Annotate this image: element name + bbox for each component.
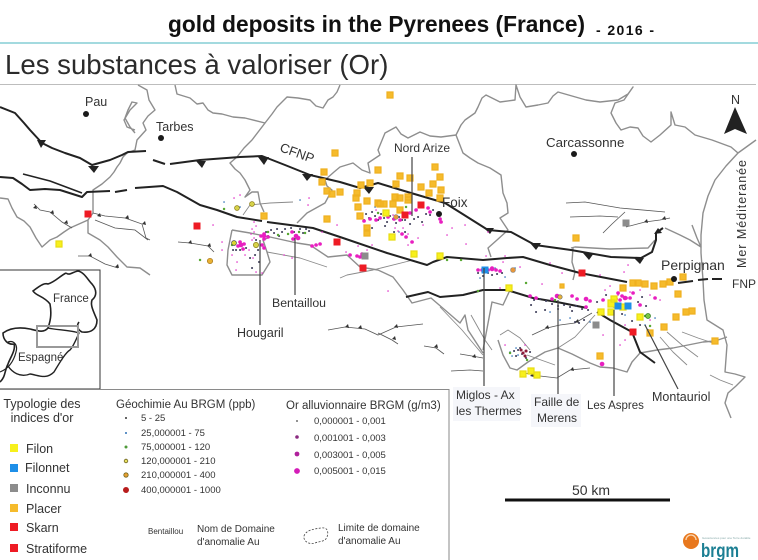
legend: or alluvionnaire: 0,005001 - 0,015 [314, 466, 386, 477]
filonnet blue squares [482, 267, 631, 309]
legend: typologie des indices d'or: Stratiforme [26, 542, 87, 556]
label: Les Aspres: Les Aspres [587, 400, 644, 412]
label: Les Aspres [587, 310, 644, 412]
legend: typologie des indices d'or: Skarn [26, 521, 59, 535]
map: CFNP fault [0, 107, 663, 264]
scale bar: 50 km [572, 482, 610, 498]
title: - 2016 - [596, 22, 654, 38]
brgm logo: Géosciences pour une Terre durable [702, 536, 751, 540]
inset locator map [0, 270, 100, 389]
legend: domain limit key: Limite de domaine [338, 523, 420, 534]
geochemistry and alluvial gold points [200, 195, 660, 364]
label: Bentaillou [272, 238, 326, 310]
label: Faille de Merens: Faille de [534, 395, 580, 409]
legend: domain name key [148, 524, 275, 548]
scale bar [505, 482, 670, 502]
title: gold deposits in the Pyrenees (France) [168, 11, 585, 37]
skarn red squares [85, 202, 636, 335]
gold placer squares [261, 92, 718, 359]
label: Faille de Merens: Merens [537, 411, 577, 425]
city and fault labels: Carcassonne [546, 135, 624, 150]
inconnu grey squares [362, 220, 629, 328]
inset locator map: Espagné [18, 352, 63, 364]
legend: domain limit key: d'anomalie Au [338, 536, 401, 547]
legend: domain name key: Bentaillou [148, 527, 183, 536]
label: Miglos - Ax les Thermes: Miglos - Ax [456, 388, 515, 402]
label: Faille de Merens [531, 300, 581, 427]
city and fault labels: Foix [442, 195, 468, 210]
legend: or alluvionnaire: 0,003001 - 0,005 [314, 450, 386, 461]
legend: géochimie: 120,000001 - 210 [141, 456, 215, 467]
legend: typologie des indices d'or [3, 397, 87, 556]
map: administrative boundaries and coast [0, 85, 756, 418]
inset locator map: France [53, 293, 89, 305]
legend: géochimie: 75,000001 - 120 [141, 442, 210, 453]
legend: géochimie: 400,000001 - 1000 [141, 485, 221, 496]
legend: typologie des indices d'or: Filonnet [25, 461, 70, 475]
city and fault labels: Tarbes [156, 120, 194, 134]
subtitle: Les substances à valoriser (Or) [5, 49, 388, 80]
legend: domain name key: Nom de Domaine [197, 524, 275, 535]
label: Hougaril: Hougaril [237, 326, 284, 340]
legend: typologie des indices d'or: Typologie des [3, 397, 81, 411]
legend frame [0, 390, 449, 560]
legend: or alluvionnaire: 0,000001 - 0,001 [314, 416, 386, 427]
legend: typologie des indices d'or: Inconnu [26, 482, 71, 496]
city and fault labels: Mer Méditeranée [735, 160, 749, 268]
legend: géochimie: Géochimie Au BRGM (ppb) [116, 399, 256, 411]
label: Montauriol [645, 325, 710, 404]
legend: typologie des indices d'or: indices d'or [11, 411, 73, 425]
city and fault labels: Pau [85, 95, 107, 109]
city and fault labels: FNP [732, 277, 756, 291]
legend: or alluvionnaire [286, 400, 441, 477]
north arrow [724, 93, 747, 134]
legend: géochimie [116, 399, 256, 496]
label: Nord Arize [394, 141, 450, 216]
city and fault labels: Perpignan [661, 257, 725, 273]
city markers [83, 111, 677, 282]
brgm logo [683, 533, 751, 560]
legend: typologie des indices d'or: Placer [26, 502, 61, 516]
label: Hougaril [237, 240, 284, 340]
legend: domain limit key [304, 523, 420, 547]
city and fault labels: CFNP [278, 140, 316, 166]
legend: or alluvionnaire: 0,001001 - 0,003 [314, 433, 386, 444]
city and fault labels [85, 95, 756, 291]
north arrow: N [731, 93, 740, 107]
filon yellow squares [56, 210, 643, 378]
legend: géochimie: 5 - 25 [141, 413, 165, 424]
label: Bentaillou: Bentaillou [272, 296, 326, 310]
label: Miglos - Ax les Thermes: les Thermes [456, 404, 522, 418]
map: minor thrust lines [33, 202, 670, 378]
label: Miglos - Ax les Thermes [453, 268, 522, 421]
map: FNP fault [0, 174, 722, 363]
label: Montauriol: Montauriol [652, 390, 710, 404]
legend: or alluvionnaire: Or alluvionnaire BRGM (g/m3) [286, 400, 441, 412]
legend: domain name key: d'anomalie Au [197, 537, 260, 548]
label: Nord Arize: Nord Arize [394, 141, 450, 155]
legend: géochimie: 210,000001 - 400 [141, 470, 215, 481]
legend: typologie des indices d'or: Filon [26, 442, 53, 456]
legend: géochimie: 25,000001 - 75 [141, 428, 205, 439]
